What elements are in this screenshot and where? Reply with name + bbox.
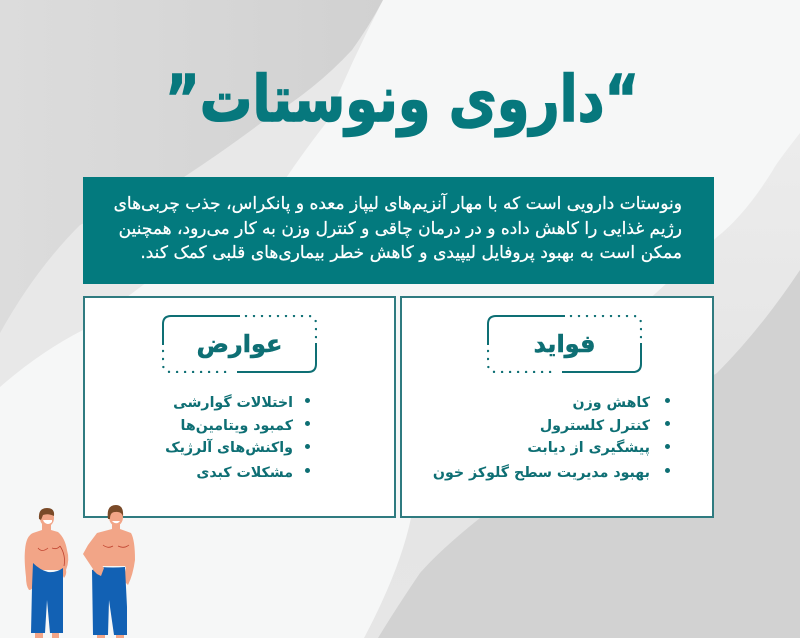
heading: benefits: فواید bbox=[534, 330, 595, 358]
intro text: ممکن است به بهبود پروفایل لیپیدی و کاهش خطر بیماری‌های قلبی کمک کند. bbox=[140, 243, 682, 263]
benefits list: کنترل کلسترول bbox=[540, 418, 650, 434]
benefits list: کاهش وزن bbox=[572, 395, 650, 411]
benefits list: پیشگیری از دیابت bbox=[527, 440, 650, 456]
illustration: two men before and after bbox=[24, 505, 135, 638]
benefits list: بهبود مدیریت سطح گلوکز خون bbox=[433, 465, 650, 481]
intro text: رژیم غذایی را کاهش داده و در درمان چاقی و کنترل وزن به کار می‌رود، همچنین bbox=[119, 219, 682, 239]
man: after bbox=[83, 505, 135, 638]
intro text bbox=[114, 192, 682, 263]
side effects list bbox=[165, 394, 310, 481]
man: before bbox=[25, 508, 68, 638]
side effects list: کمبود ویتامین‌ها bbox=[181, 418, 293, 434]
benefits list bbox=[433, 395, 670, 481]
side effects list: اختلالات گوارشی bbox=[173, 395, 293, 411]
panel: benefits bbox=[400, 296, 714, 518]
title: “داروی ونوستات” bbox=[165, 63, 639, 137]
heading: side effects: عوارض bbox=[197, 330, 282, 358]
side effects list: واکنش‌های آلرژیک bbox=[165, 440, 293, 456]
heading: benefits bbox=[487, 315, 642, 373]
intro text: ونوستات دارویی است که با مهار آنزیم‌های لیپاز معده و پانکراس، جذب چربی‌های bbox=[114, 194, 682, 214]
intro panel bbox=[83, 177, 714, 284]
heading: side effects bbox=[162, 315, 317, 373]
panel: side effects bbox=[83, 296, 396, 518]
side effects list: مشکلات کبدی bbox=[196, 465, 293, 481]
